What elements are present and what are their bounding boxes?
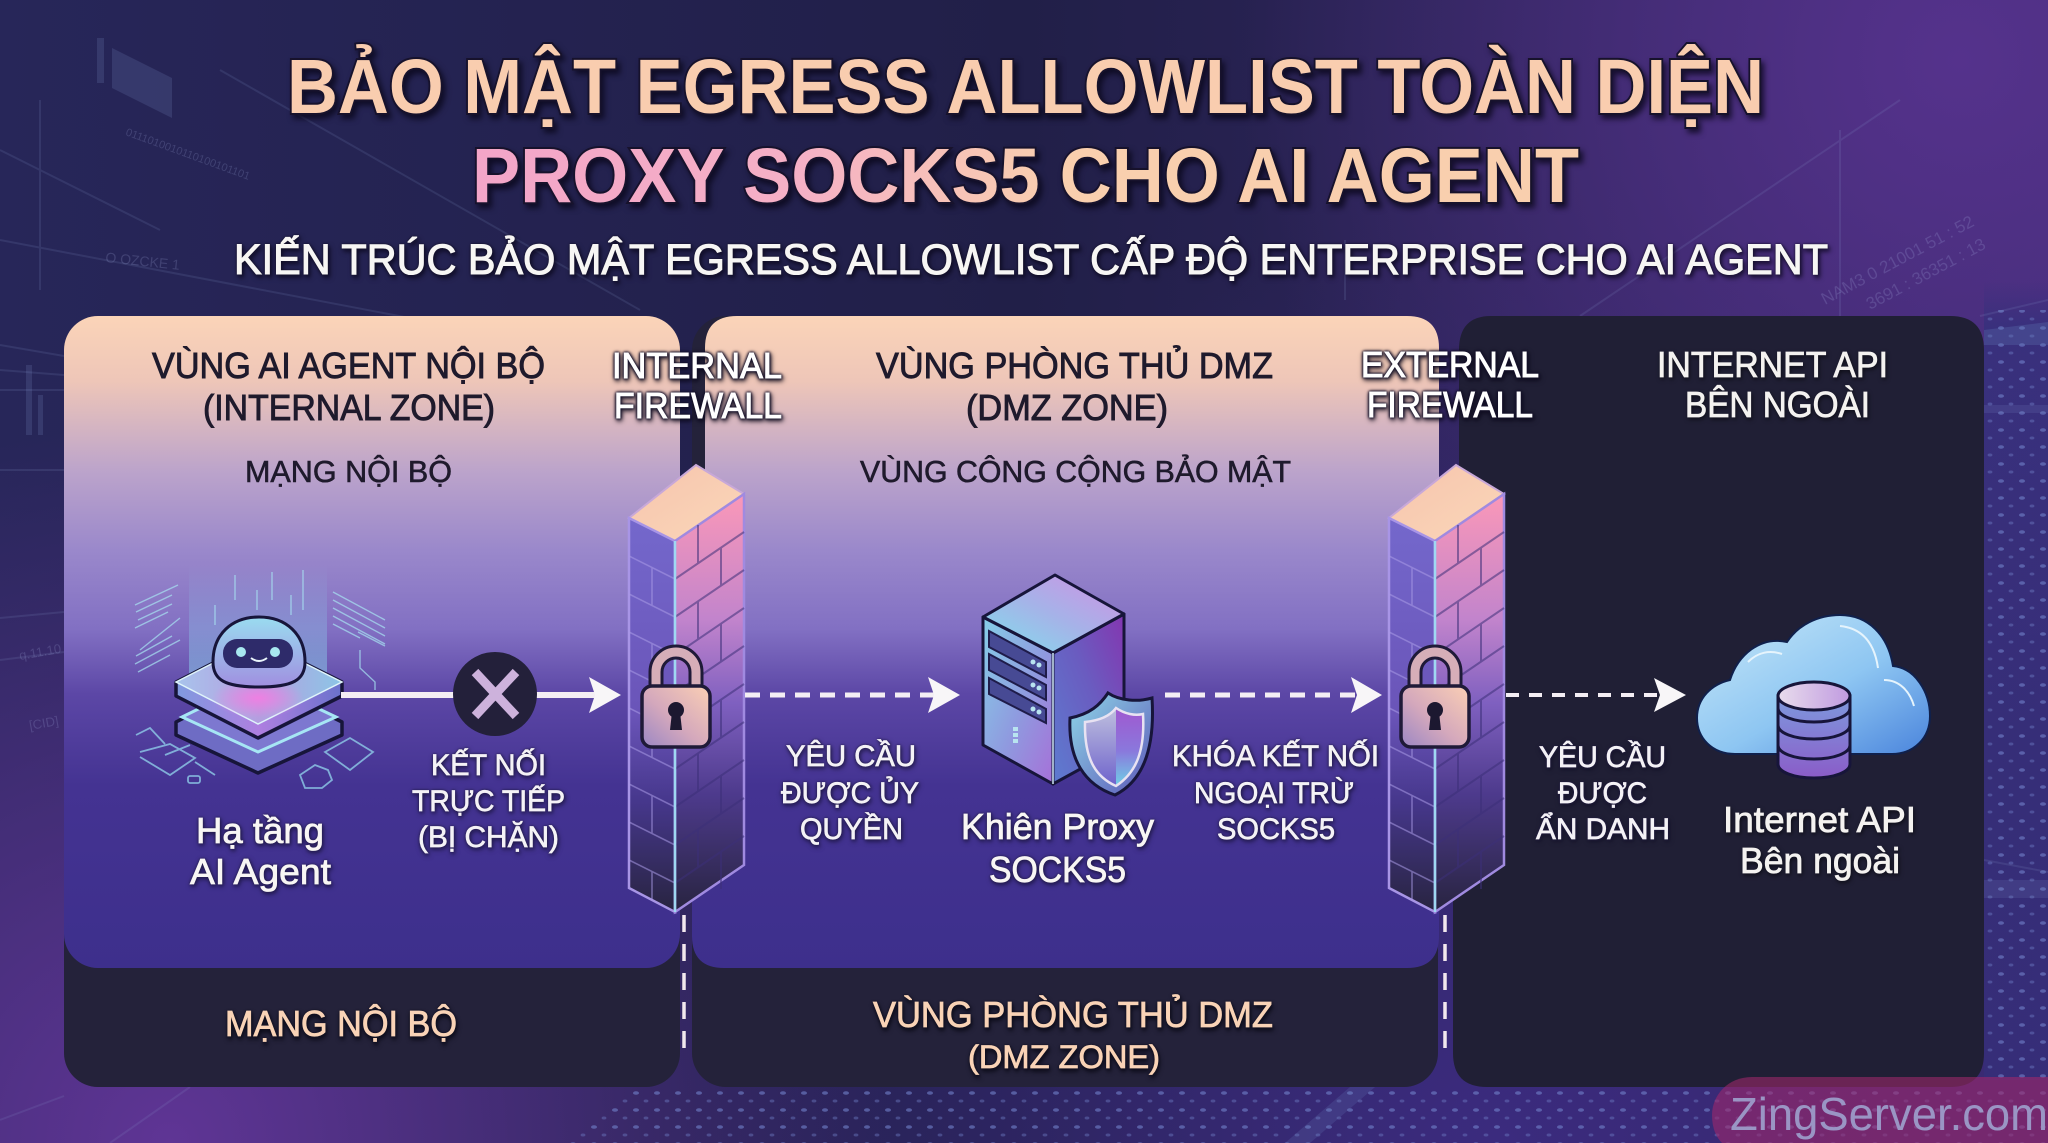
label: blocked connection: TRỰC TIẾP [412, 784, 565, 818]
icon: external firewall wall [1389, 465, 1504, 912]
robot visor [223, 639, 293, 668]
server top face [983, 575, 1124, 653]
label: external firewall: FIREWALL [1367, 384, 1533, 425]
panel: DMZ zone [692, 316, 1439, 1087]
label: authorised request [781, 739, 919, 846]
label: blocked connection: (BỊ CHẶN) [418, 821, 559, 854]
label: AI agent infrastructure: Hạ tầng [196, 810, 324, 851]
label: blocked connection: KẾT NỐI [431, 748, 546, 782]
wall left face [1389, 518, 1435, 912]
label: anonymised request: YÊU CẦU [1539, 740, 1666, 774]
icon: internet cloud with database [1697, 615, 1930, 778]
faint data text: 3691 : 36351 : 13 [1863, 235, 1989, 314]
shield [1070, 693, 1153, 795]
heading: DMZ english: (DMZ ZONE) [966, 387, 1168, 428]
label: lock except SOCKS5: KHÓA KẾT NỐI [1172, 739, 1379, 773]
server left face [983, 617, 1053, 784]
title line 2: PROXY SOCKS5 CHO AI AGENT [472, 133, 1579, 219]
top slab [176, 640, 342, 738]
title line 1: BẢO MẬT EGRESS ALLOWLIST TOÀN DIỆN [287, 43, 1764, 130]
label: internal firewall: INTERNAL [612, 345, 782, 386]
wall right face [675, 494, 744, 912]
icon: SOCKS5 proxy server [983, 575, 1153, 795]
label: authorised request: YÊU CẦU [786, 739, 916, 773]
icon: internal firewall wall [629, 465, 744, 912]
icon: AI agent infrastructure [135, 565, 385, 788]
arrow: proxy to external firewall [1165, 677, 1382, 713]
panel: internal zone [64, 316, 680, 1087]
subheading: internal network: MẠNG NỘI BỘ [245, 454, 452, 489]
faint data text: q.11.10 [18, 641, 62, 663]
divider: internal firewall dashes [682, 915, 686, 1052]
wall top [629, 465, 744, 541]
label: external firewall: EXTERNAL [1361, 344, 1539, 385]
lower slab [176, 680, 342, 773]
cloud [1697, 615, 1930, 754]
heading: DMZ zone: VÙNG PHÒNG THỦ DMZ [876, 344, 1273, 386]
footer label: internal network: MẠNG NỘI BỘ [225, 1003, 457, 1044]
database [1778, 696, 1850, 778]
label: SOCKS5 proxy: Khiên Proxy [961, 806, 1154, 847]
server slots [989, 631, 1046, 723]
label: AI agent infrastructure: AI Agent [190, 851, 331, 892]
label: authorised request: QUYỀN [800, 812, 903, 846]
arrow: authorised request [745, 677, 960, 713]
subtitle: KIẾN TRÚC BẢO MẬT EGRESS ALLOWLIST CẤP ĐỘ ENTERPRISE CHO AI AGENT [234, 235, 1828, 284]
footer label: DMZ line 1: VÙNG PHÒNG THỦ DMZ [873, 993, 1273, 1035]
wall top [1389, 465, 1504, 541]
label: lock except SOCKS5: NGOẠI TRỪ [1194, 777, 1354, 810]
subheading: secure public zone: VÙNG CÔNG CỘNG BẢO MẬT [860, 454, 1291, 489]
heading: internal zone english: (INTERNAL ZONE) [203, 387, 495, 428]
heading: internal zone: VÙNG AI AGENT NỘI BỘ [152, 345, 545, 386]
icon: external firewall lock [1401, 652, 1469, 747]
internal zone base [64, 316, 680, 1087]
label: internet API: Internet API [1723, 799, 1916, 840]
label: lock except SOCKS5: SOCKS5 [1217, 813, 1335, 846]
icon: blocked X [453, 652, 537, 736]
circuit traces [136, 728, 373, 788]
icon: internal firewall lock [642, 652, 710, 747]
footer label: DMZ line 2: (DMZ ZONE) [968, 1039, 1160, 1075]
label: SOCKS5 proxy [961, 806, 1154, 890]
label: external firewall [1361, 344, 1539, 425]
title [234, 43, 1828, 284]
server right face [1053, 614, 1124, 784]
internal zone gradient [64, 316, 680, 968]
heading: external: BÊN NGOÀI [1685, 384, 1870, 425]
label: internal firewall [612, 345, 782, 426]
label: internal firewall: FIREWALL [614, 385, 782, 426]
label: lock except SOCKS5 [1172, 739, 1379, 846]
faint data text: 0111010010110100101101 [124, 127, 251, 183]
label: internet API: Bên ngoài [1740, 840, 1900, 881]
label: AI agent infrastructure [190, 810, 331, 892]
heading: internet API: INTERNET API [1657, 344, 1888, 385]
label: authorised request: ĐƯỢC ỦY [781, 776, 919, 810]
wall left face [629, 518, 675, 912]
faint data text: O OZCKE 1 [105, 249, 181, 273]
watermark: ZingServer.com [1730, 1088, 2048, 1140]
faint data text: [CID] [28, 713, 60, 733]
label: internet API [1723, 799, 1916, 881]
faint data text [18, 127, 1989, 733]
DMZ gradient [692, 316, 1439, 968]
faint data text: NAM3 0 21001 51 : 52 [1818, 212, 1977, 309]
label: blocked connection [412, 748, 565, 854]
label: anonymised request: ĐƯỢC [1558, 777, 1647, 810]
label: anonymised request: ẨN DANH [1536, 812, 1670, 846]
code panels [135, 570, 385, 690]
wall right face [1435, 494, 1504, 912]
hologram glow [189, 565, 327, 690]
divider: external firewall dashes [1443, 915, 1447, 1052]
DMZ base [692, 316, 1438, 1087]
label: anonymised request [1536, 740, 1670, 846]
label: SOCKS5 proxy: SOCKS5 [989, 849, 1126, 890]
arrow: blocked direct connection [341, 677, 621, 713]
external panel shape [1453, 316, 1984, 1087]
panel: external internet [1453, 316, 1984, 1087]
robot head [213, 617, 305, 687]
arrow: anonymised request [1506, 678, 1686, 712]
